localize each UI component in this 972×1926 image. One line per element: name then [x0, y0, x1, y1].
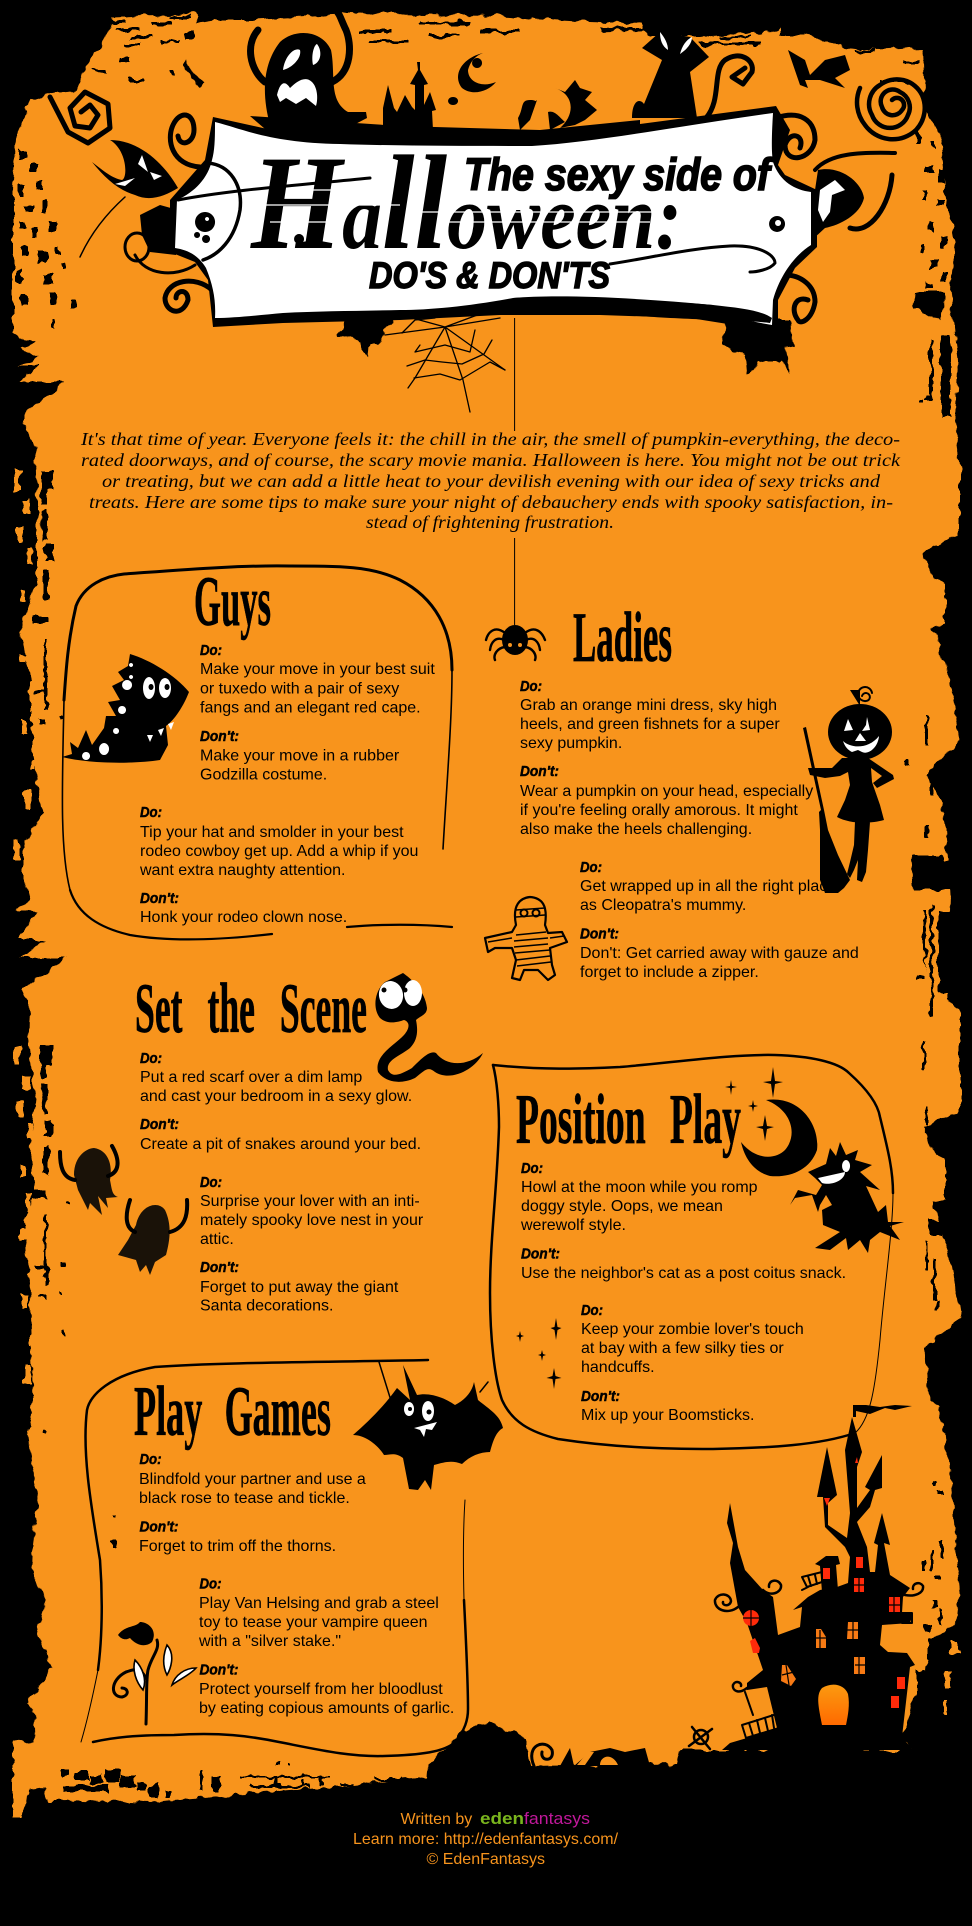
text block: Position tip 2 — [581, 1302, 804, 1424]
icon: spider — [486, 625, 545, 660]
text block: Scene tip 1: Do: — [140, 1050, 162, 1067]
text block: Position tip 1: Howl at the moon while you romp — [521, 1179, 758, 1196]
text block: Games tip 1: Don't: — [140, 1518, 179, 1536]
intro paragraph: stead of frightening frustration. — [366, 512, 614, 532]
text block: Games tip 2: Do: — [200, 1576, 222, 1592]
text block: Ladies tip 1 — [520, 678, 813, 838]
text block: Games tip 1 — [139, 1451, 366, 1555]
castle flag — [853, 1405, 912, 1417]
text block: Games tip 2: toy to tease your vampire queen — [199, 1614, 428, 1631]
text block: Guys tip 1: Godzilla costume. — [200, 766, 327, 784]
castle silhouette — [722, 1417, 915, 1750]
logo: edenfantasys — [480, 1809, 590, 1828]
text block: Games tip 2: Don't: — [200, 1662, 239, 1678]
icon: top ghost — [251, 13, 367, 142]
broom — [803, 727, 850, 893]
text block: Position tip 2: Mix up your Boomsticks. — [581, 1407, 754, 1424]
icon: ghost two — [118, 1200, 187, 1275]
text block: Scene tip 1: and cast your bedroom in a sexy glow. — [140, 1088, 412, 1105]
text block: Ladies tip 2: forget to include a zipper. — [580, 964, 759, 981]
icon: spider web — [385, 314, 505, 412]
text block: Scene tip 1: Put a red scarf over a dim lamp — [140, 1069, 362, 1086]
text block: Games tip 1: Forget to trim off the thorns. — [139, 1538, 336, 1555]
text block: Guys tip 1: fangs and an elegant red cape. — [200, 700, 421, 716]
logo: edenfantasys: fantasys — [524, 1809, 590, 1828]
icon: small castle — [383, 62, 436, 130]
heading: Do's and Don'ts: DO'S & DON'TS — [369, 255, 610, 296]
icon: upper right spiral — [776, 115, 815, 158]
splat under banner right — [722, 320, 797, 375]
icon: crescent moon — [458, 53, 496, 92]
banner: white scroll — [170, 106, 817, 332]
text block: Ladies tip 1: Wear a pumpkin on your head, especially — [520, 783, 813, 800]
icon: left spiral — [50, 92, 110, 143]
heading: Halloween: Halloween: — [250, 129, 682, 278]
footer credits: Learn more: http://edenfantasys.com/ — [353, 1831, 619, 1848]
text block: Guys tip 2 — [139, 804, 418, 926]
text block: Guys tip 2: Do: — [140, 804, 162, 821]
text block: Guys tip 1: Make your move in your best suit — [200, 661, 435, 678]
icon: upper left spiral — [170, 115, 200, 167]
banner black band at bottom — [500, 296, 772, 323]
icon: right skull with tail — [812, 153, 895, 240]
text block: Position tip 2: Keep your zombie lover's touch — [581, 1321, 804, 1338]
intro paragraph: treats. Here are some tips to make sure your night of debauchery ends with spooky satisfaction, in- — [89, 492, 893, 512]
text block: Guys tip 1 — [200, 642, 435, 784]
heading: Play Games: Play Games — [134, 1373, 331, 1451]
heading: Position Play: Position Play — [516, 1081, 741, 1159]
text block: Scene tip 2: attic. — [200, 1231, 234, 1248]
text block: Scene tip 1: Don't: — [140, 1116, 179, 1133]
text block: Position tip 1: Do: — [521, 1160, 543, 1177]
icon: hanging thread — [514, 318, 516, 625]
icon: thorny curl left — [518, 100, 537, 130]
icon: crescent moon with stars — [725, 1067, 817, 1176]
text block: Scene tip 2 — [200, 1174, 424, 1314]
orange flecks inside black edge — [14, 470, 958, 1714]
frame: Guys — [62, 566, 452, 939]
text block: Ladies tip 2: Don't: — [580, 926, 619, 942]
text block: Position tip 1 — [520, 1160, 846, 1282]
banner swashes and dots — [178, 163, 785, 272]
panel: Ladies: Ladies — [573, 599, 672, 677]
icon: bat leaf — [788, 50, 850, 88]
text block: Ladies tip 1: if you're feeling orally amorous. It might — [520, 802, 798, 819]
panel: Position Play — [490, 1055, 904, 1449]
panel: Set the Scene — [60, 970, 483, 1314]
panel: Ladies — [485, 599, 894, 981]
frame: Play Games — [81, 1360, 468, 1756]
text block: Ladies tip 1: Don't: — [520, 763, 559, 780]
blob and ring under mask — [125, 205, 195, 273]
text block: Ladies tip 2: Do: — [580, 859, 602, 876]
icon: snake — [375, 973, 483, 1082]
castle attic tower — [815, 1556, 840, 1592]
intro paragraph: rated doorways, and of course, the scary movie mania. Halloween is here. You might not be out trick — [81, 450, 901, 470]
text block: Games tip 2: with a "silver stake." — [198, 1633, 341, 1650]
text block: Scene tip 2: mately spooky love nest in your — [200, 1212, 424, 1229]
icon: lower left spiral — [165, 281, 212, 311]
banner top ornament band — [250, 116, 640, 146]
panel: Play Games — [81, 1360, 503, 1756]
footer credits: © EdenFantasys — [426, 1851, 545, 1868]
text block: Position tip 2: Do: — [581, 1302, 603, 1319]
text block: Position tip 1: werewolf style. — [520, 1217, 626, 1234]
text block: Scene tip 1: Create a pit of snakes around your bed. — [140, 1136, 421, 1153]
text block: Games tip 2: by eating copious amounts of garlic. — [199, 1700, 454, 1717]
icon: masked cat face — [80, 140, 178, 257]
footer credits: Written by — [400, 1811, 472, 1828]
icon: thorny curl right — [548, 80, 597, 130]
text block: Guys tip 2: Tip your hat and smolder in your best — [140, 824, 404, 841]
text block: Games tip 2 — [198, 1576, 454, 1717]
text block: Guys tip 2: rodeo cowboy get up. Add a whip if you — [140, 843, 418, 860]
frame: Position Play — [490, 1055, 893, 1449]
text block: Ladies tip 1: Do: — [520, 678, 542, 695]
text block: Scene tip 2: Surprise your lover with an inti- — [200, 1193, 420, 1210]
logo: edenfantasys: eden — [480, 1809, 524, 1828]
text block: Position tip 1: Don't: — [521, 1246, 560, 1262]
text block: Position tip 1: doggy style. Oops, we mean — [521, 1198, 723, 1215]
haunted castle — [428, 1405, 923, 1790]
text block: Ladies tip 1: sexy pumpkin. — [520, 735, 622, 752]
text block: Ladies tip 2: as Cleopatra's mummy. — [580, 897, 746, 914]
text block: Games tip 1: black rose to tease and tickle. — [139, 1490, 350, 1507]
text block: Scene tip 1 — [140, 1050, 421, 1153]
halloween white streaks — [255, 190, 660, 222]
text block: Games tip 1: Do: — [140, 1451, 162, 1468]
castle windows — [743, 1457, 905, 1708]
text block: Guys tip 2: Honk your rodeo clown nose. — [140, 909, 347, 926]
text block: Scene tip 2: Santa decorations. — [200, 1298, 333, 1314]
icon: ghost one — [60, 1146, 118, 1215]
panel: Guys — [62, 563, 452, 939]
intro paragraph — [80, 429, 901, 532]
text block: Position tip 2: at bay with a few silky ties or — [581, 1340, 784, 1357]
splat under banner left — [338, 318, 395, 358]
icon: bat — [353, 1362, 503, 1490]
text block: Ladies tip 1: also make the heels challenging. — [520, 821, 752, 838]
intro paragraph: It's that time of year. Everyone feels it: the chill in the air, the smell of pumpkin-everything, the deco- — [80, 429, 900, 449]
text block: Guys tip 2: want extra naughty attention. — [139, 862, 345, 879]
heading: The sexy side of: The sexy side of — [464, 149, 774, 200]
icon: grave cross — [689, 1727, 712, 1749]
text block: Position tip 2: Don't: — [581, 1388, 620, 1405]
intro paragraph: or treating, but we can add a little heat to your devilish evening with our idea of sexy tricks and — [102, 471, 880, 491]
text block: Scene tip 2: Do: — [200, 1174, 222, 1191]
panel: Guys: Guys — [194, 563, 271, 641]
icon: furry monster — [790, 1142, 904, 1253]
moon dots — [448, 58, 482, 105]
icon: black rose — [113, 1622, 196, 1724]
icon: four stars — [516, 1318, 562, 1389]
text block: Ladies tip 2: Don't: Get carried away with gauze and — [580, 945, 859, 962]
text block: Position tip 2: handcuffs. — [581, 1359, 655, 1376]
text block: Ladies tip 2 — [580, 859, 859, 981]
text block: Position tip 1: Use the neighbor's cat as a post coitus snack. — [521, 1265, 846, 1282]
castle door — [818, 1685, 849, 1725]
icon: black cat — [632, 32, 752, 118]
heading: Set the Scene: Set the Scene — [135, 970, 367, 1048]
text block: Guys tip 1: Make your move in a rubber — [200, 748, 400, 764]
text block: Guys tip 2: Don't: — [140, 890, 179, 907]
text block: Ladies tip 1: heels, and green fishnets for a super — [520, 716, 780, 733]
icon: right spiral — [857, 79, 925, 139]
text block: Games tip 2: Protect yourself from her bloodlust — [199, 1681, 443, 1698]
icon: lower right spiral — [785, 275, 815, 322]
text block: Games tip 2: Play Van Helsing and grab a steel — [199, 1595, 439, 1612]
text block: Scene tip 2: Don't: — [200, 1259, 239, 1276]
text block: Scene tip 2: Forget to put away the giant — [200, 1279, 399, 1296]
text block: Guys tip 1: Don't: — [200, 728, 239, 745]
lady body — [808, 758, 894, 882]
mound and scroll in the ground — [428, 1722, 650, 1790]
icon: green monster — [62, 654, 189, 763]
footer credits — [353, 1809, 619, 1868]
banner ornaments — [50, 13, 925, 625]
text block: Ladies tip 2: Get wrapped up in all the right places — [580, 878, 844, 895]
text block: Guys tip 1: Do: — [200, 642, 222, 659]
castle scrolls and balconies — [715, 1572, 923, 1738]
text block: Games tip 1: Blindfold your partner and use a — [139, 1471, 366, 1488]
icon: mummy — [485, 897, 567, 980]
text block: Ladies tip 1: Grab an orange mini dress, sky high — [520, 697, 777, 714]
icon: pumpkin lady with broom — [803, 687, 894, 893]
text block: Guys tip 1: or tuxedo with a pair of sexy — [200, 680, 399, 698]
